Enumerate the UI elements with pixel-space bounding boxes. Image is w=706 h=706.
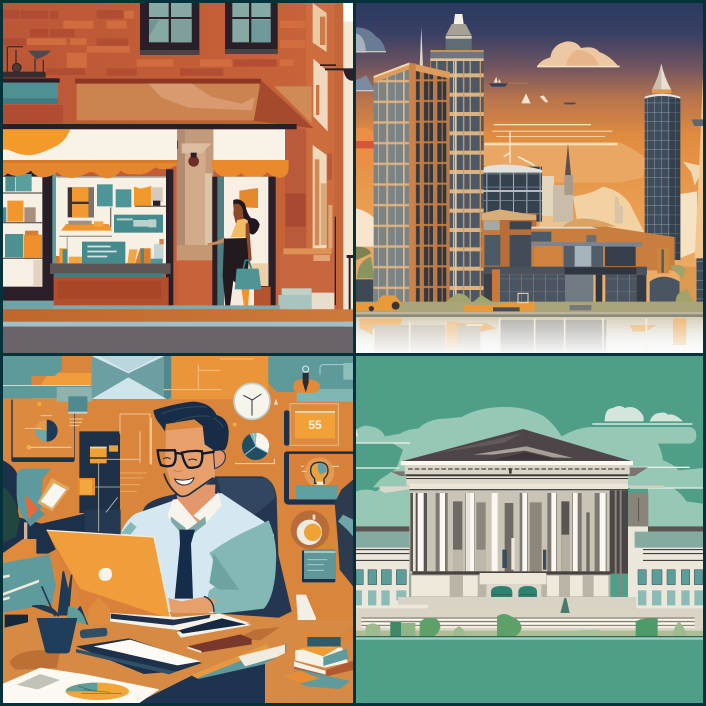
brick wall texture	[3, 10, 305, 123]
entablature	[401, 461, 633, 490]
office chair	[100, 476, 292, 618]
collar shade	[171, 516, 206, 537]
colonnade shadow wall	[410, 490, 628, 597]
right code card	[284, 404, 338, 446]
street lamp	[320, 64, 353, 310]
clock	[234, 383, 278, 419]
trees	[356, 246, 694, 302]
laptop	[47, 530, 172, 625]
left chart card	[11, 399, 83, 462]
desk front orange edge	[137, 644, 270, 702]
cuff	[204, 596, 214, 612]
side wings	[356, 526, 703, 610]
columns	[410, 493, 607, 571]
central display window	[52, 169, 173, 306]
top background blocks	[3, 356, 353, 402]
wispy streaks	[485, 124, 617, 145]
clouds behind building	[356, 407, 703, 528]
right brick pier	[283, 129, 332, 261]
low orange building	[481, 209, 675, 273]
shop door	[212, 177, 276, 306]
closed eyes	[163, 458, 197, 460]
open document on desk	[76, 638, 202, 674]
jaw line	[164, 474, 213, 496]
woman with shopping bag	[207, 199, 261, 310]
sky glow and haze	[356, 127, 697, 258]
right plant leaf	[338, 515, 353, 536]
keyboard base and tablet	[110, 613, 280, 640]
right gauge and note	[291, 510, 335, 582]
clouds	[356, 27, 620, 91]
person on steps	[560, 598, 570, 613]
pediment roof	[401, 429, 632, 461]
hair highlights	[162, 407, 223, 428]
right plant	[335, 480, 353, 586]
stone pillar	[176, 129, 214, 261]
ear	[213, 450, 225, 469]
phone and notebook	[80, 627, 252, 653]
pie chart	[233, 423, 274, 464]
cream background beyond building	[343, 3, 353, 336]
left display window	[3, 170, 54, 301]
hand on keyboard	[168, 596, 215, 616]
ground floor glazing	[484, 267, 696, 304]
stairs and terrace	[356, 597, 703, 637]
under desk	[3, 640, 353, 703]
ground strip	[356, 302, 703, 312]
chair highlight	[217, 478, 275, 515]
hair	[153, 402, 229, 451]
stone planter steps	[278, 288, 334, 309]
flying boats and birds	[489, 77, 576, 104]
cloud streaks	[356, 423, 703, 489]
awning right	[212, 129, 289, 178]
small white clouds	[356, 406, 683, 436]
awning left	[3, 129, 178, 178]
nose	[173, 470, 183, 472]
left dark area with plant and phone	[3, 460, 85, 630]
orange vehicles	[356, 293, 591, 312]
right lightbulb card	[284, 451, 353, 505]
water reflection	[356, 317, 703, 353]
teal sleeve	[208, 520, 276, 614]
right code card: 55	[308, 418, 322, 432]
tall back tower	[420, 14, 484, 303]
canopy beam	[3, 124, 297, 129]
glasses	[158, 450, 215, 468]
left shoulder stripe	[121, 522, 137, 534]
left balcony with machine	[3, 47, 60, 104]
waterfront road	[356, 312, 703, 317]
collar	[167, 492, 222, 532]
white box on right	[296, 595, 316, 620]
panel: smiling man working on a laptop	[3, 356, 353, 706]
smile	[175, 478, 194, 485]
desk front edge	[137, 644, 287, 702]
panel: brick storefront with shopper	[3, 3, 353, 353]
torso and shirt	[121, 493, 274, 615]
ground line	[356, 636, 703, 640]
neck	[176, 485, 215, 530]
plinth	[410, 571, 611, 608]
dark center panel	[78, 414, 152, 535]
circuit lines top	[163, 359, 253, 390]
roof wings	[380, 467, 664, 526]
distant spire and block	[542, 143, 623, 223]
tall front tower	[374, 63, 450, 303]
corner side wall	[306, 3, 332, 248]
face	[165, 427, 215, 496]
envelope	[92, 356, 171, 400]
sidewalk and street	[3, 301, 353, 353]
shop sign	[75, 79, 314, 128]
upper windows	[140, 3, 278, 55]
shop counter	[50, 263, 171, 305]
necktie	[175, 530, 195, 599]
shirt shade	[209, 553, 239, 590]
book stack	[283, 637, 353, 689]
hedges	[366, 614, 686, 636]
panel: neoclassical government building	[356, 356, 703, 703]
mid glass building	[483, 165, 542, 222]
desk white band	[238, 645, 285, 666]
antenna on roof	[504, 132, 535, 165]
report papers with pie	[3, 668, 159, 703]
desk surface	[3, 613, 353, 706]
man	[121, 402, 276, 616]
desk plant	[32, 571, 87, 653]
small tablet on top left	[57, 387, 92, 414]
panel: city skyline at sunset	[356, 3, 703, 353]
right edge spire	[683, 75, 703, 303]
far round tower	[645, 63, 680, 260]
desk shadow	[10, 650, 60, 670]
